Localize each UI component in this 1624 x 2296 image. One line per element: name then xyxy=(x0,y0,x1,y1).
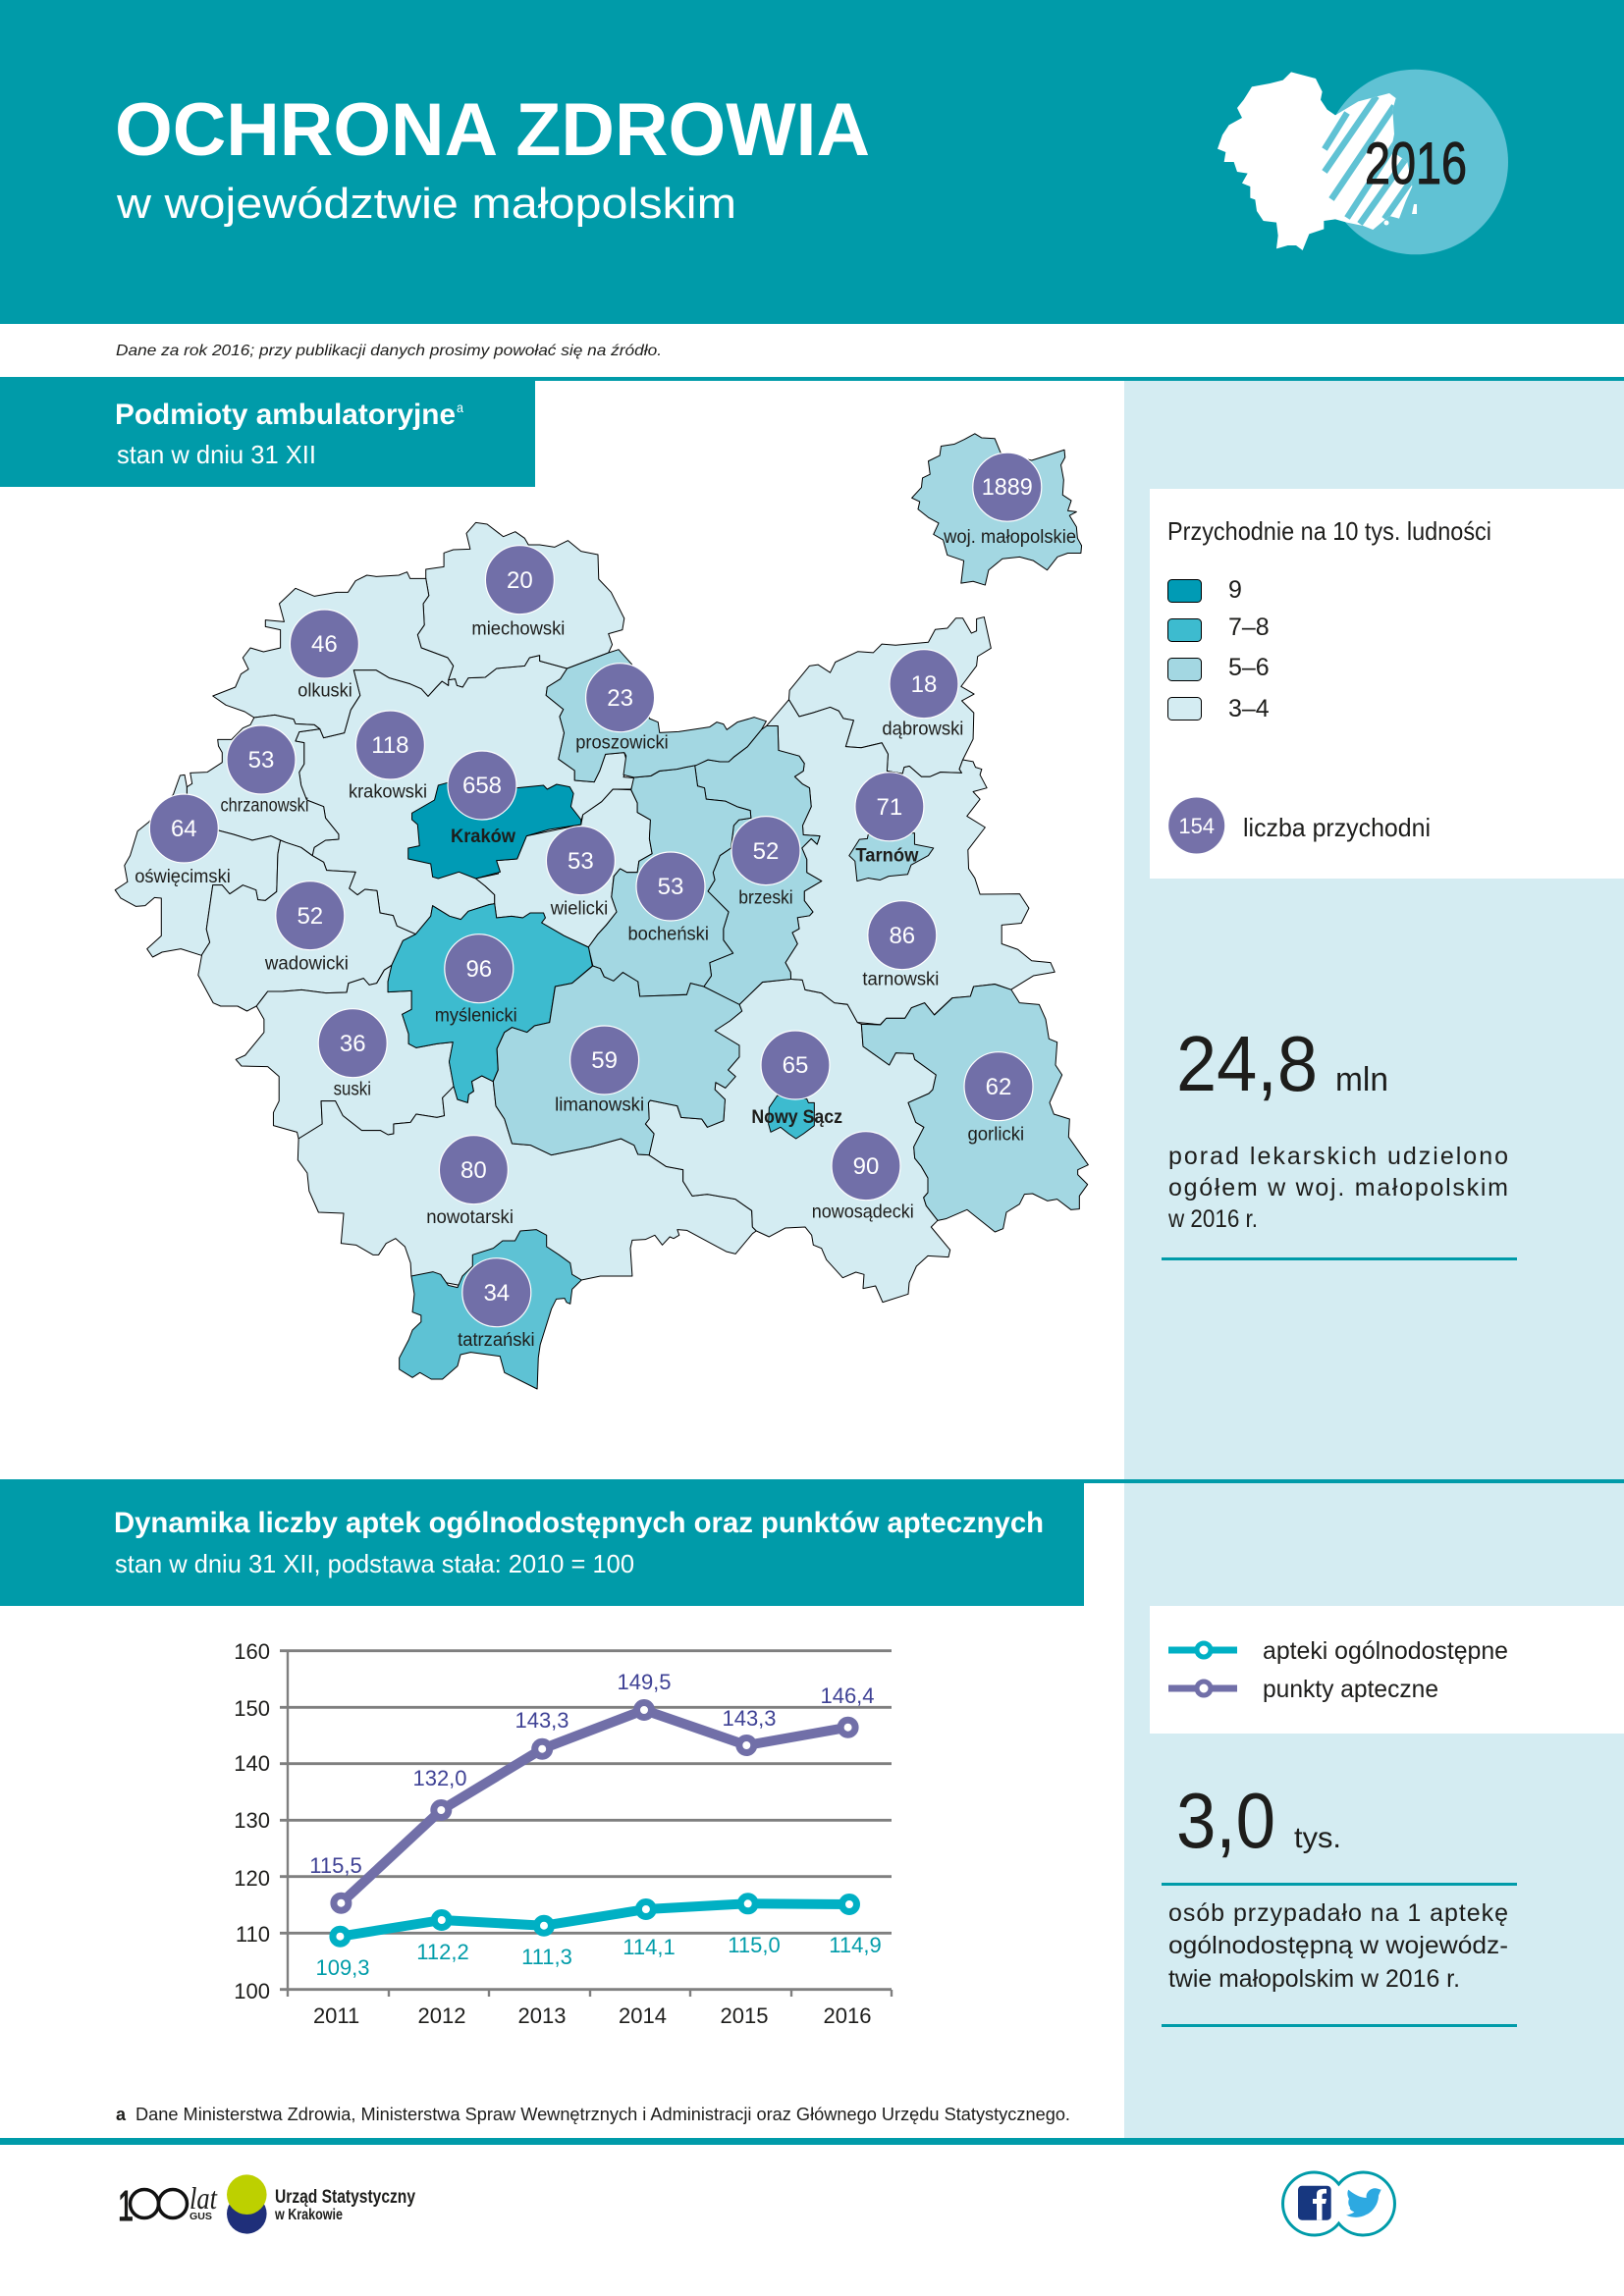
region: olkuski xyxy=(213,572,454,738)
y axis labels: 110 xyxy=(236,1922,270,1947)
panel: map legend: 9 xyxy=(1228,576,1242,604)
stat: persons per pharmacy: 3,0 xyxy=(1176,1777,1275,1864)
icon: facebook xyxy=(1298,2186,1331,2220)
data labels: apteki ogolnodostepne: 114,9 xyxy=(829,1933,882,1957)
region: chrzanowski xyxy=(187,715,339,856)
region: nowosadecki xyxy=(645,979,950,1303)
marker: suski: suski xyxy=(334,1080,371,1100)
panel: map legend: 7–8 xyxy=(1228,614,1270,641)
section tab: pharmacies: stan w dniu 31 XII, podstawa stała: 2010 = 100 xyxy=(115,1549,634,1578)
y axis labels: 130 xyxy=(234,1808,270,1833)
panel: map legend: Przychodnie na 10 tys. ludności xyxy=(1167,516,1491,546)
data labels: punkty apteczne: 115,5 xyxy=(309,1853,362,1878)
stat: medical consultations: porad lekarskich udzielono xyxy=(1168,1143,1508,1170)
x axis labels: 2011 xyxy=(313,2003,359,2028)
marker: bochenski: bocheński xyxy=(628,925,709,945)
marker: Tarnow: 71 xyxy=(877,794,902,821)
small map: whole voivodeship xyxy=(912,434,1082,585)
logo: statistical office xyxy=(227,2174,415,2234)
logo: 100 lat GUS: 1 xyxy=(118,2182,134,2230)
marker: woj. malopolskie: woj. małopolskie xyxy=(943,527,1076,548)
panel: map legend xyxy=(1150,489,1624,879)
marker: brzeski xyxy=(731,817,800,909)
marker: nowosadecki: 90 xyxy=(853,1153,879,1180)
logo: 100 lat GUS: GUS xyxy=(189,2212,212,2222)
data labels: punkty apteczne: 143,3 xyxy=(514,1708,569,1733)
marker: krakowski xyxy=(349,711,427,803)
region: bochenski xyxy=(588,766,751,996)
x axis labels: 2015 xyxy=(721,2003,768,2028)
data labels: punkty apteczne: 143,3 xyxy=(722,1706,777,1731)
section tab: pharmacies xyxy=(0,1483,1084,1606)
choropleth map of powiats xyxy=(115,434,1088,1389)
marker: chrzanowski: chrzanowski xyxy=(220,796,308,817)
marker: wielicki: wielicki xyxy=(550,899,608,920)
marker: gorlicki xyxy=(964,1052,1033,1146)
marker: Krakow: 658 xyxy=(462,773,502,799)
footnote: Dane Ministerstwa Zdrowia, Ministerstwa Spraw Wewnętrznych i Administracji oraz Głównego Urzędu Statystycznego. xyxy=(135,2105,1070,2124)
region: dabrowski xyxy=(788,617,991,776)
marker: bochenski xyxy=(628,852,709,945)
marker: Krakow xyxy=(448,751,516,847)
subtitle: w województwie małopolskim xyxy=(116,180,736,228)
marker: gorlicki: 62 xyxy=(986,1074,1011,1100)
marker: limanowski xyxy=(555,1026,644,1116)
region: gorlicki xyxy=(861,985,1088,1232)
marker: brzeski: 52 xyxy=(753,838,779,865)
region: nowotarski xyxy=(298,1076,756,1293)
data labels: apteki ogolnodostepne: 115,0 xyxy=(728,1933,781,1957)
region: brzeski xyxy=(695,726,822,1005)
marker: myslenicki xyxy=(435,934,517,1027)
data labels: apteki ogolnodostepne: 111,3 xyxy=(521,1945,572,1969)
data labels: punkty apteczne: 146,4 xyxy=(820,1683,875,1708)
marker: Krakow: Kraków xyxy=(451,827,515,847)
marker: wielicki xyxy=(546,827,615,920)
region: suski xyxy=(236,965,454,1139)
region: myslenicki xyxy=(388,904,592,1102)
stat: medical consultations: w 2016 r. xyxy=(1167,1205,1258,1233)
marker: myslenicki: 96 xyxy=(465,956,492,983)
logo: statistical office: Urząd Statystyczny xyxy=(275,2187,415,2208)
y axis labels: 120 xyxy=(234,1866,270,1891)
marker: dabrowski: 18 xyxy=(911,671,937,698)
marker: nowotarski xyxy=(426,1136,514,1228)
y axis labels: 160 xyxy=(234,1639,270,1664)
data labels: apteki ogolnodostepne xyxy=(315,1933,882,1980)
marker: dabrowski xyxy=(882,650,963,739)
panel: map legend: liczba przychodni xyxy=(1243,813,1431,842)
marker: oswiecimski: 64 xyxy=(171,816,197,842)
section divider xyxy=(0,1479,1624,1483)
data labels: punkty apteczne xyxy=(309,1670,875,1878)
marker: suski: 36 xyxy=(340,1031,366,1057)
marker: gorlicki: gorlicki xyxy=(967,1125,1024,1146)
region: oswiecimski xyxy=(115,774,281,957)
section divider xyxy=(0,377,1624,381)
marker: woj. malopolskie xyxy=(943,453,1076,548)
region: city of Krakow xyxy=(408,782,581,879)
marker: oswiecimski: oświęcimski xyxy=(135,867,231,887)
marker: tarnowski: 86 xyxy=(889,923,915,949)
stat: medical consultations: 24,8 xyxy=(1176,1020,1318,1107)
panel: map legend: 5–6 xyxy=(1228,654,1270,681)
section tab: ambulatory: a xyxy=(457,400,463,415)
marker: wadowicki xyxy=(264,881,349,975)
data labels: punkty apteczne: 149,5 xyxy=(617,1670,672,1694)
marker: woj. malopolskie: 1889 xyxy=(982,474,1033,501)
marker: myslenicki: myślenicki xyxy=(435,1006,517,1027)
region: krakowski xyxy=(296,656,635,934)
stat: medical consultations: mln xyxy=(1335,1061,1388,1098)
marker: wielicki: 53 xyxy=(568,848,594,875)
region: proszowicki xyxy=(546,650,766,782)
marker: Tarnow xyxy=(855,773,924,866)
panel: chart legend: apteki ogólnodostępne xyxy=(1263,1637,1508,1665)
marker: tatrzanski: tatrzański xyxy=(458,1330,535,1351)
header band xyxy=(0,0,1624,324)
logo: statistical office: w Krakowie xyxy=(274,2207,343,2223)
marker: nowosadecki xyxy=(812,1132,914,1223)
footer divider xyxy=(0,2138,1624,2145)
marker: proszowicki: 23 xyxy=(607,685,633,712)
data labels: apteki ogolnodostepne: 114,1 xyxy=(623,1935,676,1959)
marker: krakowski: krakowski xyxy=(349,782,427,803)
marker: limanowski: limanowski xyxy=(555,1095,644,1116)
marker: tarnowski: tarnowski xyxy=(862,970,939,990)
series: apteki ogolnodostepne xyxy=(333,1896,856,1944)
marker: olkuski: 46 xyxy=(311,631,338,658)
x axis labels: 2014 xyxy=(619,2003,667,2028)
region: city of Tarnow xyxy=(849,833,934,881)
marker: tatrzanski: 34 xyxy=(483,1280,510,1307)
marker: Nowy Sacz: 65 xyxy=(783,1052,808,1079)
x axis labels: 2012 xyxy=(418,2003,465,2028)
region: limanowski xyxy=(493,966,742,1155)
panel: right column lower xyxy=(1124,1483,1624,2138)
marker: proszowicki xyxy=(575,664,669,754)
data labels: apteki ogolnodostepne: 109,3 xyxy=(315,1955,370,1980)
marker: olkuski: olkuski xyxy=(298,680,352,701)
marker: Nowy Sacz: Nowy Sącz xyxy=(751,1107,842,1128)
region: wielicki xyxy=(476,789,652,947)
marker: tarnowski xyxy=(862,901,939,990)
stat: persons per pharmacy: osób przypadało na 1 aptekę xyxy=(1168,1899,1508,1927)
marker: bochenski: 53 xyxy=(658,874,683,900)
marker: miechowski: miechowski xyxy=(471,619,565,640)
stat: persons per pharmacy: twie małopolskim w 2016 r. xyxy=(1168,1965,1460,1993)
logo: 100 lat GUS: lat xyxy=(189,2180,218,2216)
marker: proszowicki: proszowicki xyxy=(575,733,669,754)
marker: chrzanowski xyxy=(220,725,308,817)
marker: miechowski: 20 xyxy=(507,567,533,594)
marker: limanowski: 59 xyxy=(591,1047,618,1074)
icons: social media xyxy=(1283,2172,1394,2235)
x axis labels: 2016 xyxy=(824,2003,871,2028)
panel: right column upper xyxy=(1124,381,1624,1479)
section tab: pharmacies: Dynamika liczby aptek ogólnodostępnych oraz punktów aptecznych xyxy=(114,1507,1044,1539)
y axis labels: 100 xyxy=(234,1979,270,2003)
region: miechowski xyxy=(417,522,624,687)
marker: dabrowski: dąbrowski xyxy=(882,719,963,739)
panel: map legend: 3–4 xyxy=(1228,695,1270,722)
stat: persons per pharmacy: tys. xyxy=(1294,1822,1341,1854)
section tab: ambulatory: Podmioty ambulatoryjne xyxy=(115,399,456,431)
icon: twitter xyxy=(1346,2188,1381,2217)
stat: medical consultations: ogółem w woj. małopolskim xyxy=(1168,1174,1508,1201)
marker: tatrzanski xyxy=(458,1258,535,1351)
y axis labels: 140 xyxy=(234,1751,270,1776)
x axis labels: 2013 xyxy=(518,2003,566,2028)
stat: persons per pharmacy xyxy=(1162,1777,1517,2027)
data labels: apteki ogolnodostepne: 112,2 xyxy=(416,1940,469,1964)
panel: chart legend xyxy=(1150,1606,1624,1734)
region: city of Nowy Sacz xyxy=(769,1095,814,1139)
data labels: punkty apteczne: 132,0 xyxy=(412,1766,467,1790)
marker: chrzanowski: 53 xyxy=(248,747,274,774)
title: OCHRONA ZDROWIA xyxy=(115,88,870,172)
y axis labels: 150 xyxy=(234,1696,270,1721)
section tab: ambulatory: stan w dniu 31 XII xyxy=(117,440,316,469)
marker: wadowicki: 52 xyxy=(297,903,323,930)
stat: persons per pharmacy: ogólnodostępną w wojewódz- xyxy=(1168,1932,1508,1959)
source note: Dane za rok 2016; przy publikacji danych prosimy powołać się na źródło. xyxy=(116,343,662,359)
x axis labels xyxy=(313,2003,871,2028)
marker: krakowski: 118 xyxy=(371,732,409,759)
marker: nowosadecki: nowosądecki xyxy=(812,1202,914,1223)
marker: brzeski: brzeski xyxy=(738,888,793,909)
marker: miechowski xyxy=(471,546,565,640)
icon: region silhouette with year badge: 2016 xyxy=(1365,131,1467,196)
y axis labels xyxy=(234,1639,270,2003)
marker: Tarnow: Tarnów xyxy=(855,845,919,866)
footnote: a xyxy=(116,2105,127,2124)
marker: nowotarski: 80 xyxy=(460,1157,487,1184)
stat: medical consultations xyxy=(1162,1020,1517,1260)
panel: chart legend: punkty apteczne xyxy=(1263,1676,1438,1703)
region: tarnowski xyxy=(767,700,1055,1025)
series: punkty apteczne xyxy=(334,1702,855,1910)
marker: suski xyxy=(318,1009,387,1100)
logo: 100 lat GUS xyxy=(118,2180,218,2230)
panel: map legend: 154 xyxy=(1178,814,1215,838)
region: tatrzanski xyxy=(400,1230,581,1389)
marker: nowotarski: nowotarski xyxy=(426,1207,514,1228)
marker: olkuski xyxy=(290,610,358,701)
region: wadowicki xyxy=(198,840,415,1011)
section tab: ambulatory xyxy=(0,381,535,487)
marker: wadowicki: wadowicki xyxy=(264,954,349,975)
marker: Nowy Sacz xyxy=(751,1031,842,1128)
marker: oswiecimski xyxy=(135,794,231,887)
icon: region silhouette with year badge xyxy=(1208,69,1508,255)
line chart xyxy=(234,1639,892,2028)
